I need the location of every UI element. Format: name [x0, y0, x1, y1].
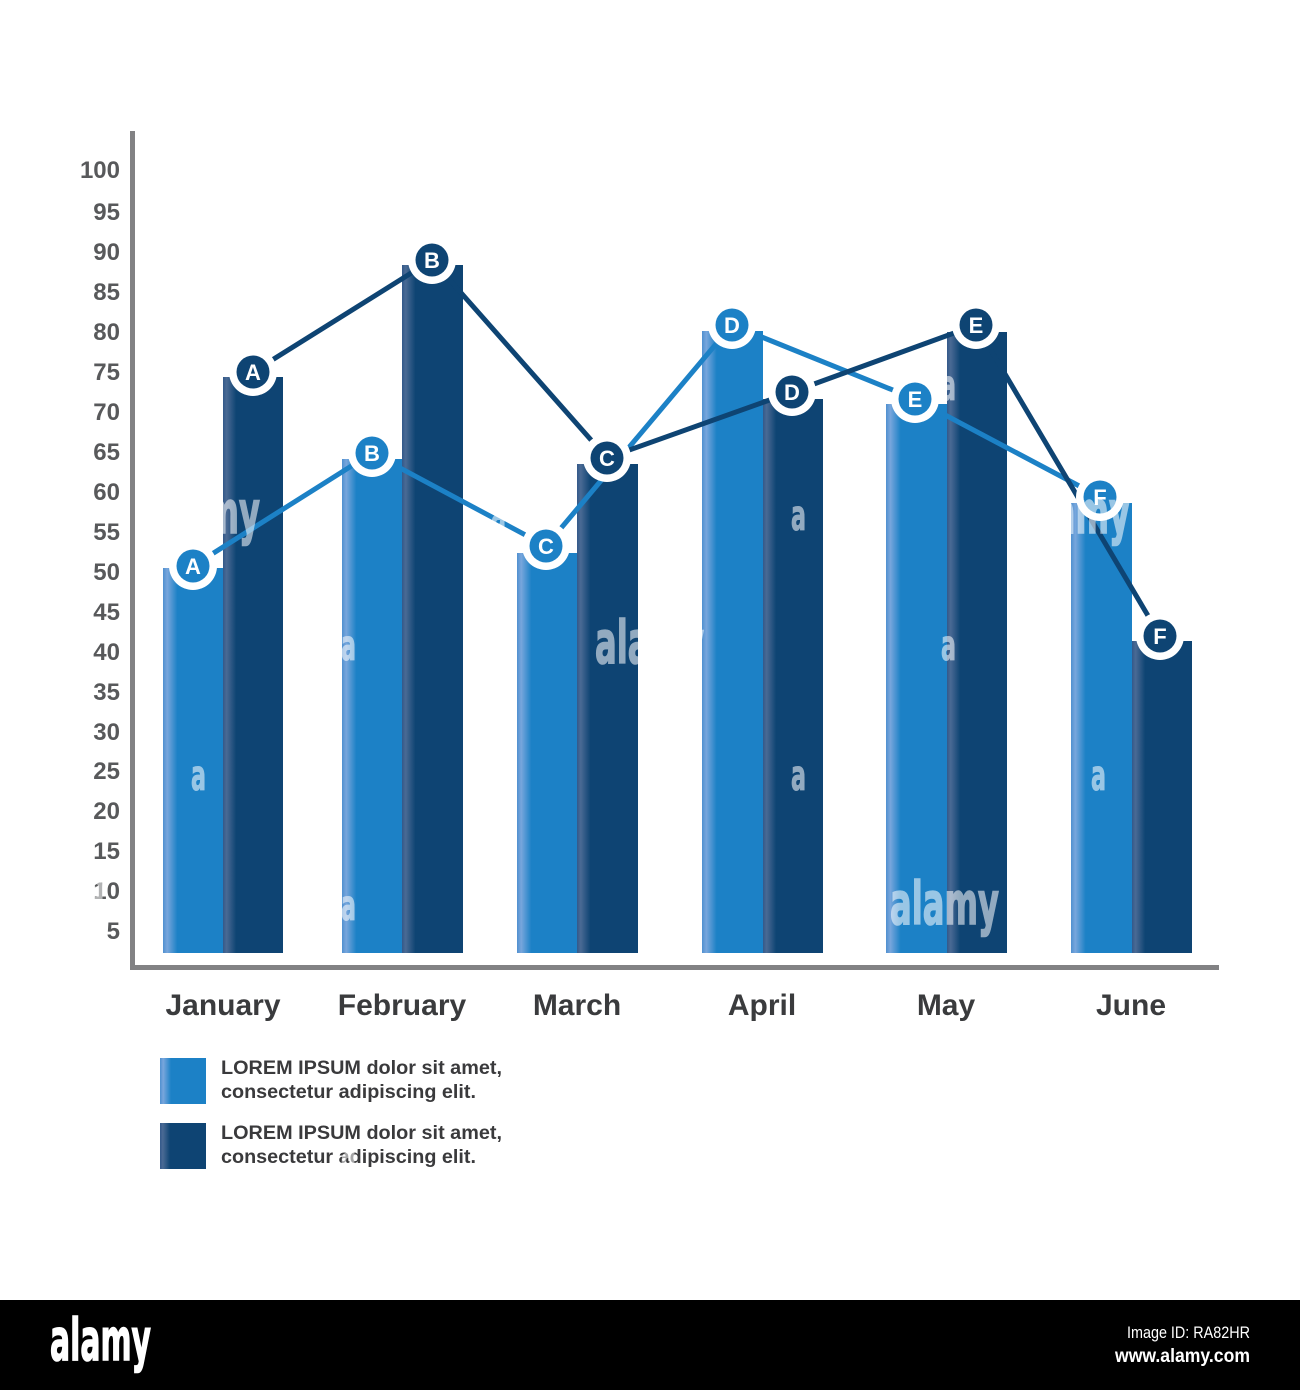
footer logo: alamy: [50, 1306, 151, 1374]
legend: series 2: consectetur adipiscing elit.: [221, 1147, 476, 1168]
markers: series 1: [169, 301, 1124, 590]
watermarks: a: [341, 621, 356, 670]
markers: series 1: F: [1093, 485, 1107, 510]
legend: series 1: [160, 1058, 502, 1104]
legend: series 1: consectetur adipiscing elit.: [221, 1082, 476, 1103]
y-axis labels: 95: [93, 199, 120, 226]
bars: series 1: [163, 331, 1132, 953]
watermarks: a: [191, 751, 206, 800]
footer bar: [0, 1300, 1300, 1390]
bars: series 2: [223, 265, 1192, 953]
month labels: January: [165, 989, 281, 1022]
watermarks: alamy: [1021, 478, 1130, 547]
markers: series 2: D: [784, 380, 800, 405]
y-axis labels: 65: [93, 439, 120, 466]
watermarks: [89, 361, 1130, 1178]
y-axis labels: 35: [93, 679, 120, 706]
y-axis labels: [80, 157, 120, 945]
y-axis labels: 60: [93, 479, 120, 506]
legend: series 2: [160, 1123, 502, 1169]
y-axis labels: 85: [93, 279, 120, 306]
y-axis labels: 30: [93, 719, 120, 746]
y-axis labels: 15: [93, 838, 120, 865]
markers: series 2: F: [1153, 624, 1167, 649]
markers: series 1: C: [538, 534, 554, 559]
watermarks: a: [791, 751, 806, 800]
line: series 2: [253, 260, 1160, 636]
markers: series 2: B: [424, 248, 440, 273]
markers: series 1: A: [185, 554, 201, 579]
y-axis labels: 100: [80, 157, 120, 184]
month labels: February: [338, 989, 466, 1022]
markers: series 1: E: [908, 387, 922, 412]
markers: series 2: E: [969, 313, 983, 338]
y-axis labels: 50: [93, 559, 120, 586]
axes: [130, 131, 1219, 970]
watermarks: a: [341, 1129, 356, 1178]
watermarks: a: [341, 881, 356, 930]
watermarks: a: [941, 361, 956, 410]
month labels: March: [533, 989, 621, 1022]
month labels: [165, 989, 1166, 1022]
markers: series 2: A: [245, 360, 261, 385]
y-axis labels: 25: [93, 758, 120, 785]
markers: series 1: D: [724, 313, 740, 338]
legend: series 1: LOREM IPSUM dolor sit amet,: [221, 1058, 502, 1079]
month labels: April: [728, 989, 796, 1022]
month labels: June: [1096, 989, 1166, 1022]
legend: series 2: LOREM IPSUM dolor sit amet,: [221, 1123, 502, 1144]
website: www.alamy.com: [1114, 1346, 1250, 1367]
y-axis labels: 75: [93, 359, 120, 386]
watermarks: alamy: [595, 608, 704, 677]
watermarks: a: [791, 491, 806, 540]
y-axis labels: 90: [93, 239, 120, 266]
y-axis labels: 45: [93, 599, 120, 626]
y-axis labels: 20: [93, 798, 120, 825]
y-axis labels: 55: [93, 519, 120, 546]
watermarks: alamy: [151, 478, 260, 547]
watermarks: alamy: [890, 869, 999, 938]
y-axis labels: 70: [93, 399, 120, 426]
watermarks: a: [941, 621, 956, 670]
month labels: May: [917, 989, 975, 1022]
y-axis labels: 80: [93, 319, 120, 346]
markers: series 2: C: [599, 446, 615, 471]
y-axis labels: 5: [107, 918, 120, 945]
watermarks: a: [491, 491, 506, 540]
watermarks: a: [89, 863, 104, 912]
line: series 1: [193, 325, 1100, 566]
markers: series 2: [229, 236, 1184, 660]
y-axis labels: 40: [93, 639, 120, 666]
y-axis labels: 10: [93, 878, 120, 905]
watermarks: a: [1091, 751, 1106, 800]
image id: Image ID: RA82HR: [1127, 1323, 1250, 1342]
markers: series 1: B: [364, 441, 380, 466]
